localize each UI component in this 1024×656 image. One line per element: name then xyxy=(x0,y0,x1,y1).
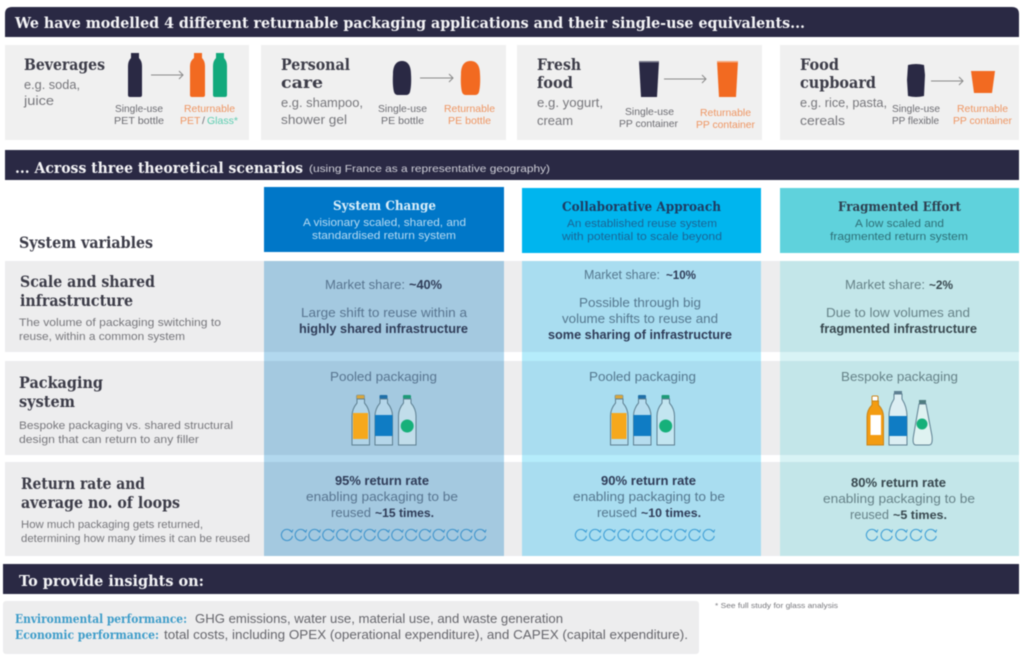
icon: pooled bottles, system change xyxy=(352,395,416,445)
text block: system change return rate: ~15 times. xyxy=(375,506,434,520)
panel: food cupboard: PP container xyxy=(953,115,1012,127)
panel: fresh food: Fresh xyxy=(537,55,581,74)
header bar: three scenarios: (using France as a representative geography) xyxy=(309,163,550,175)
text block: collaborative return rate xyxy=(573,473,725,520)
header bar: modelled applications xyxy=(5,7,1019,37)
row label: packaging system: system xyxy=(19,392,75,411)
row label: scale and shared infrastructure: infrastructure xyxy=(20,291,133,310)
text block: fragmented return rate: ~5 times. xyxy=(893,508,947,522)
row label: return rate and loops: determining how many times it can be reused xyxy=(21,533,250,545)
panel: food cupboard: Returnable xyxy=(957,103,1008,115)
panel: food cupboard: Food xyxy=(800,55,839,74)
heading: system variables: System variables xyxy=(19,233,153,252)
icon: 15 reuse loops xyxy=(281,529,486,541)
text block: collaborative scale: ~10% xyxy=(666,268,696,282)
text block: collaborative scale: Market share: xyxy=(584,268,660,282)
panel: personal care: shower gel xyxy=(281,113,347,127)
panel: system change column xyxy=(264,261,504,556)
panel: system change header: System Change xyxy=(333,199,436,214)
panel: beverages: Glass* xyxy=(207,115,238,127)
row label: packaging system xyxy=(19,373,233,446)
panel: collaborative approach header xyxy=(522,188,761,253)
icon: returnable glass bottle xyxy=(213,53,227,97)
arrow: fresh food xyxy=(664,75,706,83)
header bar: three scenarios xyxy=(5,150,1019,180)
panel: fresh food: e.g. yogurt, xyxy=(537,96,603,110)
text block: system change scale: Large shift to reuse within a xyxy=(301,305,468,320)
panel: fragmented effort column xyxy=(780,261,1019,556)
header bar: three scenarios: ... Across three theoretical scenarios xyxy=(15,159,303,177)
panel: insights: Economic performance: xyxy=(15,628,159,642)
header bar: insights: To provide insights on: xyxy=(19,572,204,590)
panel: personal care: PE bottle xyxy=(448,115,491,127)
arrow: personal care xyxy=(420,74,453,82)
panel: food cupboard: Single-use xyxy=(892,103,940,115)
panel: collaborative approach header: Collaborative Approach xyxy=(562,200,721,215)
row label: packaging system: Packaging xyxy=(19,373,103,392)
text block: collaborative return rate: enabling packaging to be xyxy=(573,489,725,504)
text block: fragmented scale: Market share: xyxy=(845,277,925,292)
row label: return rate and loops: Return rate and xyxy=(21,474,145,493)
footnote: * See full study for glass analysis xyxy=(715,601,838,610)
arrow: food cupboard xyxy=(931,77,963,85)
panel: system change header: A visionary scaled, shared, and xyxy=(303,217,466,229)
panel: insights: total costs, including OPEX (operational expenditure), and CAPEX (capital expenditure). xyxy=(164,627,688,642)
text block: fragmented scale: Due to low volumes and xyxy=(826,305,970,320)
label: bespoke packaging: Bespoke packaging xyxy=(841,369,958,384)
icon: single-use PE bottle xyxy=(393,61,411,95)
text block: collaborative return rate: ~10 times. xyxy=(641,506,701,520)
text block: fragmented scale: fragmented infrastructure xyxy=(820,321,977,336)
panel: insights: GHG emissions, water use, material use, and waste generation xyxy=(195,611,563,626)
panel: system change header xyxy=(264,187,504,252)
panel: fresh food: PP container xyxy=(619,118,678,130)
panel: beverages: PET bottle xyxy=(114,115,164,127)
text block: fragmented return rate: 80% return rate xyxy=(851,475,946,490)
panel: fresh food: PP container xyxy=(696,119,755,131)
icon: returnable PE bottle xyxy=(461,61,480,95)
panel: fresh food: Returnable xyxy=(700,107,751,119)
text block: system change scale xyxy=(299,277,468,336)
panel: personal care: PE bottle xyxy=(381,115,424,127)
panel: fragmented effort header: Fragmented Effort xyxy=(838,200,961,215)
header bar: modelled applications: We have modelled 4 different returnable packaging applications and their single-use equivalents... xyxy=(14,14,805,32)
panel: food cupboard: e.g. rice, pasta, xyxy=(800,96,887,110)
text block: system change return rate: enabling packaging to be xyxy=(306,489,458,504)
arrow: beverages xyxy=(151,71,183,79)
text block: fragmented return rate: reused xyxy=(850,507,889,522)
text block: fragmented return rate: enabling packaging to be xyxy=(823,491,975,506)
icon: returnable PP tub xyxy=(971,71,995,93)
panel: beverages: / xyxy=(202,115,205,127)
icon: 5 reuse loops xyxy=(866,529,937,541)
panel: collaborative approach column xyxy=(522,261,761,556)
panel: insights xyxy=(3,601,699,654)
text block: collaborative scale: some sharing of infrastructure xyxy=(548,327,732,342)
panel: beverages xyxy=(5,45,249,140)
panel: food cupboard: cupboard xyxy=(800,73,876,92)
text block: system change scale: highly shared infrastructure xyxy=(299,321,468,336)
panel: personal care: care xyxy=(281,73,323,92)
text block: fragmented return rate xyxy=(823,475,975,522)
icon: single-use PP container xyxy=(639,61,659,97)
row label: scale and shared infrastructure: Scale and shared xyxy=(20,272,155,291)
icon: 10 reuse loops xyxy=(575,529,715,541)
panel: food cupboard: PP flexible xyxy=(892,115,939,127)
panel: personal care: e.g. shampoo, xyxy=(281,96,363,110)
icon: single-use PET bottle xyxy=(128,53,142,97)
panel: beverages: Single-use xyxy=(115,103,163,115)
text block: system change return rate xyxy=(306,473,458,520)
panel: personal care: Returnable xyxy=(444,103,495,115)
panel: beverages: e.g. soda, xyxy=(24,78,80,92)
panel: insights: Environmental performance: xyxy=(15,612,187,626)
panel: collaborative approach header: with potential to scale beyond xyxy=(561,231,722,243)
text block: system change return rate: 95% return rate xyxy=(335,473,429,488)
row label: scale and shared infrastructure xyxy=(19,272,221,343)
label: pooled packaging, collaborative: Pooled packaging xyxy=(589,369,696,384)
text block: collaborative return rate: 90% return rate xyxy=(601,473,696,488)
panel: beverages: Returnable xyxy=(184,103,235,115)
row label: return rate and loops xyxy=(21,474,250,545)
icon: returnable PET bottle xyxy=(190,53,205,97)
panel: fresh food: food xyxy=(537,73,573,92)
panel: personal care: Personal xyxy=(281,55,350,74)
panel: beverages: PET xyxy=(180,115,201,127)
panel: personal care: Single-use xyxy=(378,103,427,115)
panel: collaborative approach header: An established reuse system xyxy=(567,218,717,230)
icon: single-use PP flexible xyxy=(907,64,925,97)
text block: collaborative scale: Possible through big xyxy=(579,295,701,310)
panel: beverages: juice xyxy=(23,94,54,108)
text block: collaborative scale xyxy=(548,268,732,342)
panel: beverages: Beverages xyxy=(24,55,105,74)
label: pooled packaging, system change: Pooled packaging xyxy=(330,369,437,384)
text block: system change scale: Market share: xyxy=(325,277,405,292)
icon: returnable PP container xyxy=(717,61,738,97)
row label: scale and shared infrastructure: The volume of packaging switching to xyxy=(19,317,221,329)
panel: system change header: standardised return system xyxy=(312,230,456,242)
row label: packaging system: design that can return to any filler xyxy=(19,434,199,446)
panel: fresh food xyxy=(517,45,762,140)
text block: fragmented scale xyxy=(820,277,977,336)
text block: collaborative return rate: reused xyxy=(597,505,637,520)
panel: fragmented effort header: fragmented return system xyxy=(830,231,968,243)
panel: fresh food: Single-use xyxy=(625,106,674,118)
panel: personal care xyxy=(261,45,506,140)
text block: system change return rate: reused xyxy=(331,505,371,520)
panel: food cupboard xyxy=(780,45,1019,140)
panel: fragmented effort header: A low scaled and xyxy=(855,218,944,230)
panel: row backgrounds xyxy=(5,261,1019,556)
icon: bespoke bottles xyxy=(867,391,932,445)
panel: fresh food: cream xyxy=(537,114,573,128)
text block: system change scale: ~40% xyxy=(409,277,442,292)
panel: food cupboard: cereals xyxy=(800,114,845,128)
row label: scale and shared infrastructure: reuse, within a common system xyxy=(19,331,185,343)
row label: return rate and loops: average no. of loops xyxy=(21,493,180,512)
text block: collaborative scale: volume shifts to reuse and xyxy=(562,311,718,326)
row label: return rate and loops: How much packaging gets returned, xyxy=(21,519,203,531)
icon: pooled bottles, collaborative xyxy=(610,395,674,445)
header bar: insights xyxy=(3,564,1019,594)
panel: fragmented effort header xyxy=(780,188,1019,253)
row label: packaging system: Bespoke packaging vs. shared structural xyxy=(19,420,233,432)
text block: fragmented scale: ~2% xyxy=(929,278,953,292)
